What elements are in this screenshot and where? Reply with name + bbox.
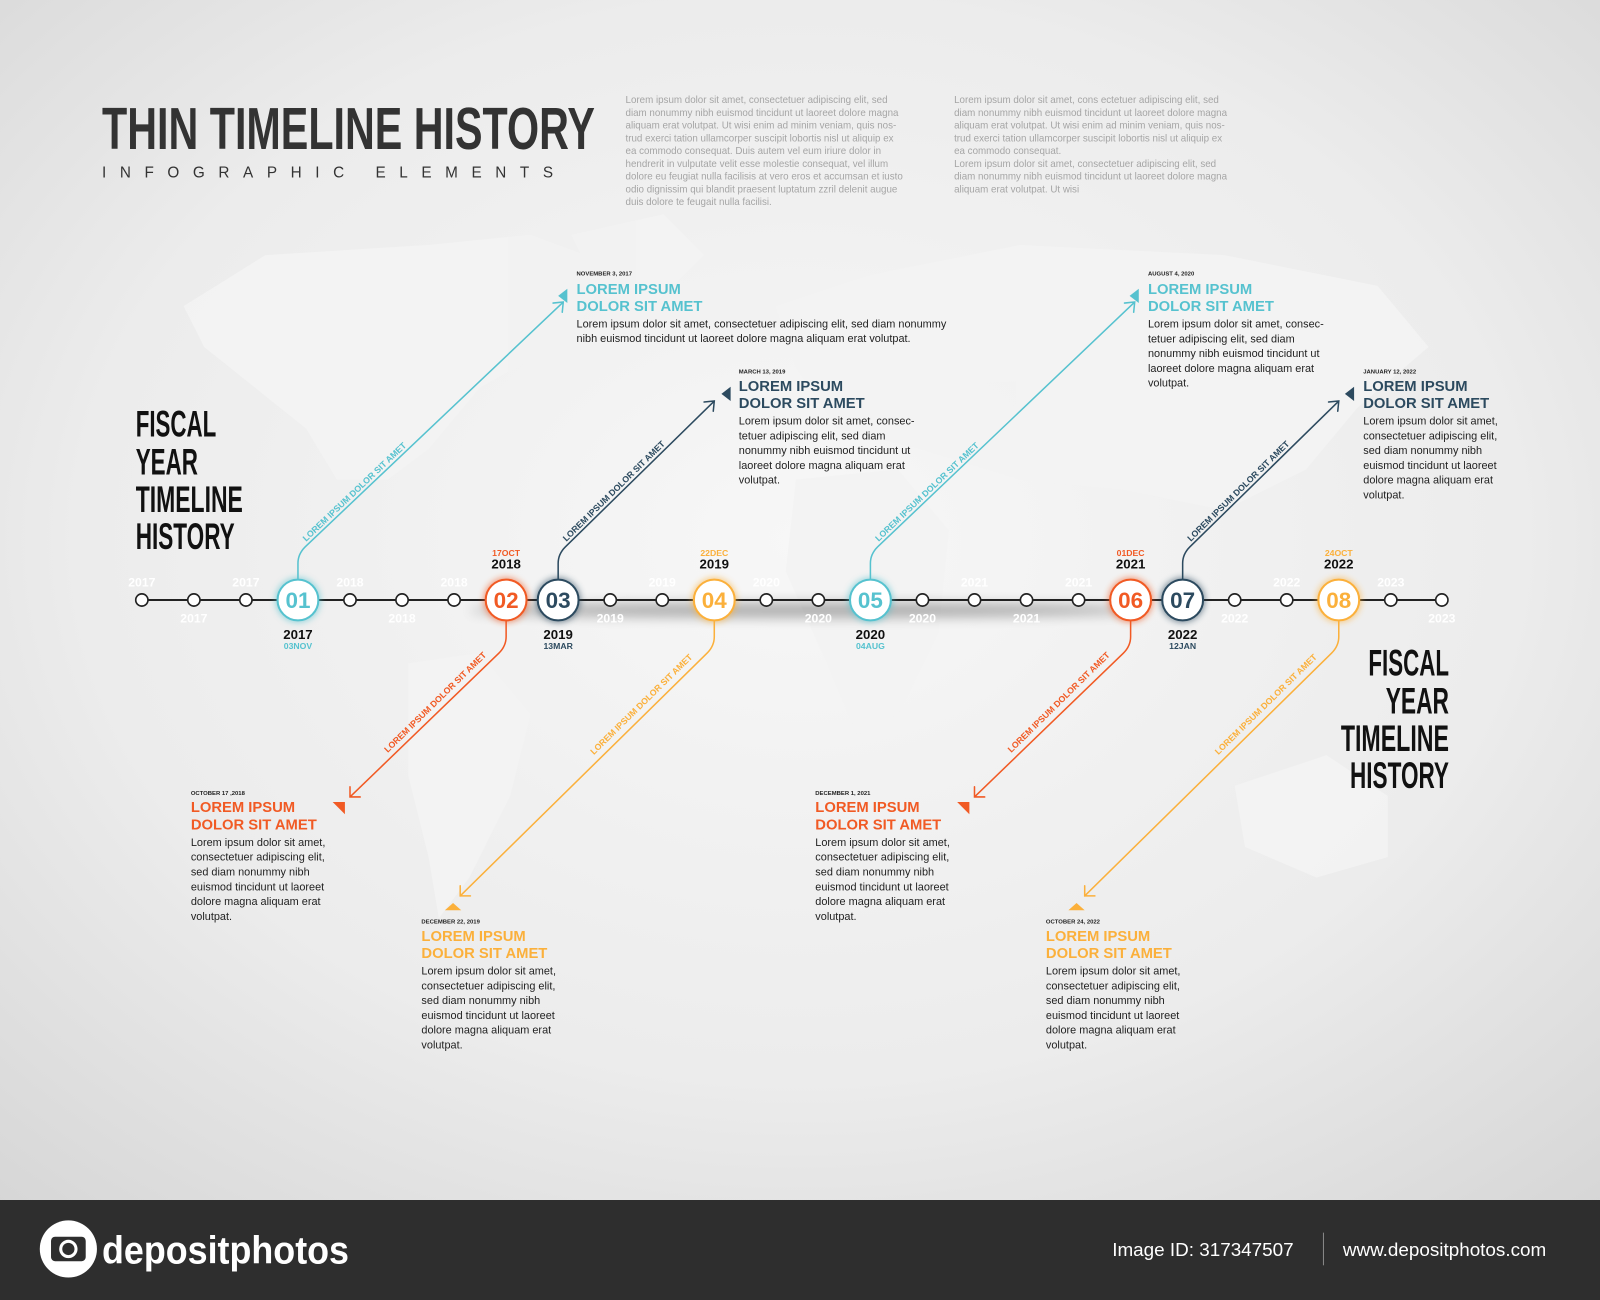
milestone 08: 08 — [1326, 588, 1351, 613]
milestone 02: 02 — [494, 588, 519, 613]
intro text column 1: dolore eu feugiat nulla facilisis at vero eros et accumsan et iusto — [626, 172, 903, 183]
event 04: volutpat. — [421, 1039, 463, 1051]
event 07: DOLOR SIT AMET — [1363, 396, 1489, 412]
timeline axis: 2017 — [180, 611, 208, 625]
event 07: volutpat. — [1363, 489, 1404, 501]
timeline axis — [128, 576, 1456, 625]
event 05 — [1130, 272, 1324, 390]
milestone date labels: 2020 — [856, 627, 885, 642]
intro text column 2: aliquam erat volutpat. Ut wisi enim ad minim veniam, quis nos- — [954, 121, 1225, 132]
timeline axis: 2021 — [1065, 576, 1092, 590]
footer bar: www.depositphotos.com — [1342, 1239, 1546, 1260]
event 04: consectetuer adipiscing elit, — [421, 980, 555, 992]
intro text column 1: Lorem ipsum dolor sit amet, consectetuer adipiscing elit, sed — [626, 95, 888, 106]
event 08 — [1046, 903, 1180, 1051]
intro text column 2 — [954, 95, 1228, 195]
event 07 — [1345, 369, 1498, 501]
event 07: LOREM IPSUM — [1363, 379, 1468, 395]
fiscal year heading left: TIMELINE — [136, 479, 243, 520]
event 06: consectetuer adipiscing elit, — [815, 852, 949, 864]
milestone date labels: 04AUG — [856, 641, 885, 651]
event 08: euismod tincidunt ut laoreet — [1046, 1010, 1179, 1022]
event 01: DOLOR SIT AMET — [577, 299, 702, 315]
intro text column 2: diam nonummy nibh euismod tincidunt ut laoreet dolore magna — [954, 172, 1228, 183]
intro text column 1: diam nonummy nibh euismod tincidunt ut laoreet dolore magna — [626, 108, 899, 119]
timeline axis: 2019 — [649, 576, 676, 590]
milestone circles — [276, 578, 1361, 622]
event 06: Lorem ipsum dolor sit amet, — [815, 837, 950, 849]
milestone 06 — [1108, 578, 1153, 622]
milestone date labels: 03NOV — [284, 641, 312, 651]
event 01: Lorem ipsum dolor sit amet, consectetuer adipiscing elit, sed diam nonummy — [577, 319, 947, 331]
diagonal labels: LOREM IPSUM DOLOR SIT AMET — [1213, 652, 1319, 757]
milestone date labels — [283, 548, 1354, 651]
fiscal year heading right: TIMELINE — [1341, 718, 1449, 759]
milestone 08 — [1316, 578, 1361, 622]
event 08: LOREM IPSUM — [1046, 929, 1150, 945]
milestone date labels: 2019 — [700, 556, 729, 571]
event 05: nonummy nibh euismod tincidunt ut — [1148, 348, 1320, 360]
event 07: dolore magna aliquam erat — [1363, 475, 1493, 487]
event 05: AUGUST 4, 2020 — [1148, 272, 1195, 278]
diagonal labels: LOREM IPSUM DOLOR SIT AMET — [301, 440, 409, 543]
milestone 03 — [536, 578, 581, 622]
title — [102, 95, 595, 182]
event 04: LOREM IPSUM — [421, 929, 526, 945]
event 03: Lorem ipsum dolor sit amet, consec- — [739, 415, 915, 427]
milestone date labels: 2022 — [1324, 556, 1354, 571]
event 05: laoreet dolore magna aliquam erat — [1148, 363, 1314, 375]
fiscal year heading right: FISCAL — [1368, 643, 1449, 684]
milestone 05 — [848, 578, 893, 622]
diagonal labels: LOREM IPSUM DOLOR SIT AMET — [561, 438, 667, 543]
event 08: sed diam nonummy nibh — [1046, 995, 1165, 1007]
timeline axis: 2023 — [1377, 576, 1405, 590]
timeline axis: 2021 — [961, 576, 988, 590]
timeline axis: 2017 — [128, 576, 156, 590]
fiscal year heading right — [1341, 643, 1449, 796]
intro text column 1: odio dignissim qui blandit praesent luptatum zzril delenit augue — [626, 184, 897, 195]
timeline shadow — [469, 603, 1143, 617]
connectors — [298, 302, 1339, 896]
timeline axis: 2020 — [909, 611, 936, 625]
event 08: consectetuer adipiscing elit, — [1046, 980, 1180, 992]
intro text column 2: Lorem ipsum dolor sit amet, cons ectetuer adipiscing elit, sed — [954, 95, 1219, 106]
icon: camera logo — [40, 1220, 97, 1278]
footer bar: Image ID: 317347507 — [1112, 1239, 1294, 1260]
event 02 — [191, 791, 345, 923]
timeline axis: 2023 — [1428, 611, 1456, 625]
event 05: LOREM IPSUM — [1148, 282, 1252, 298]
intro text column 1 — [626, 95, 903, 208]
timeline axis: 2020 — [753, 576, 780, 590]
intro text column 2: trud exerci tation ullamcorper suscipit lobortis nisl ut aliquip ex — [954, 133, 1222, 144]
event 05: tetuer adipiscing elit, sed diam — [1148, 333, 1295, 345]
fiscal year heading left: HISTORY — [136, 516, 235, 557]
milestone date labels: 2022 — [1168, 627, 1197, 642]
intro text column 1: trud exerci tation ullamcorper suscipit lobortis nisl ut aliquip ex — [626, 133, 894, 144]
milestone date labels: 2017 — [283, 627, 313, 642]
intro text column 1: aliquam erat volutpat. Ut wisi enim ad minim veniam, quis nos- — [626, 121, 896, 132]
event 06 — [815, 791, 969, 923]
event 02: volutpat. — [191, 911, 232, 923]
event 08: dolore magna aliquam erat — [1046, 1025, 1176, 1037]
event 07: Lorem ipsum dolor sit amet, — [1363, 415, 1498, 427]
event 02: euismod tincidunt ut laoreet — [191, 881, 324, 893]
event 07: consectetuer adipiscing elit, — [1363, 430, 1497, 442]
event 03: LOREM IPSUM — [739, 379, 843, 395]
event 03: MARCH 13, 2019 — [739, 369, 786, 375]
milestone 06: 06 — [1118, 588, 1143, 613]
event 06: LOREM IPSUM — [815, 800, 920, 816]
event 08: DOLOR SIT AMET — [1046, 946, 1172, 962]
milestone date labels: 24OCT — [1325, 548, 1353, 558]
event 05: DOLOR SIT AMET — [1148, 299, 1274, 315]
event 03: laoreet dolore magna aliquam erat — [739, 460, 905, 472]
footer bar — [0, 1200, 1600, 1300]
event 06: sed diam nonummy nibh — [815, 867, 934, 879]
milestone date labels: 13MAR — [543, 641, 574, 651]
timeline axis: 2022 — [1273, 576, 1301, 590]
title: THIN TIMELINE HISTORY — [102, 95, 595, 162]
timeline axis: 2020 — [805, 611, 832, 625]
milestone 07: 07 — [1170, 588, 1195, 613]
fiscal year heading left: FISCAL — [136, 404, 216, 445]
milestone 04: 04 — [702, 588, 727, 613]
event 02: sed diam nonummy nibh — [191, 867, 310, 879]
timeline axis: 2018 — [336, 576, 364, 590]
intro text column 2: ea commodo consequat. — [954, 146, 1061, 157]
diagonal labels: LOREM IPSUM DOLOR SIT AMET — [588, 652, 695, 757]
event 03: DOLOR SIT AMET — [739, 396, 865, 412]
milestone 04 — [692, 578, 737, 622]
world map silhouette — [184, 214, 1429, 918]
event 08: OCTOBER 24, 2022 — [1046, 919, 1101, 925]
event 03: tetuer adipiscing elit, sed diam — [739, 430, 885, 442]
event 04: euismod tincidunt ut laoreet — [421, 1010, 555, 1022]
milestone date labels: 2021 — [1116, 556, 1145, 571]
event 01 — [558, 272, 947, 345]
event 02: Lorem ipsum dolor sit amet, — [191, 837, 325, 849]
milestone date labels: 01DEC — [1117, 548, 1145, 558]
intro text column 2: aliquam erat volutpat. Ut wisi — [954, 184, 1079, 195]
event 04: DOLOR SIT AMET — [421, 946, 547, 962]
milestone 02 — [484, 578, 529, 622]
event 02: LOREM IPSUM — [191, 800, 295, 816]
event 03 — [721, 369, 915, 487]
event 05: volutpat. — [1148, 378, 1189, 390]
event 06: volutpat. — [815, 911, 857, 923]
intro text column 1: ea commodo consequat. Duis autem vel eum iriure dolor in — [626, 146, 881, 157]
event 01: nibh euismod tincidunt ut laoreet dolore magna aliquam erat volutpat. — [577, 333, 911, 345]
event 04: sed diam nonummy nibh — [421, 995, 540, 1007]
timeline axis: 2018 — [440, 576, 468, 590]
footer bar: depositphotos — [102, 1229, 349, 1272]
timeline axis: 2019 — [597, 611, 624, 625]
milestone date labels: 2018 — [491, 556, 521, 571]
event 07: euismod tincidunt ut laoreet — [1363, 460, 1497, 472]
event 02: DOLOR SIT AMET — [191, 818, 317, 834]
event 07: JANUARY 12, 2022 — [1363, 369, 1417, 375]
intro text column 1: hendrerit in vulputate velit esse molestie consequat, vel illum — [626, 159, 888, 170]
event 04 — [421, 903, 556, 1051]
event 03: nonummy nibh euismod tincidunt ut — [739, 445, 910, 457]
event 08: volutpat. — [1046, 1039, 1087, 1051]
diagonal labels — [301, 438, 1319, 757]
event 06: dolore magna aliquam erat — [815, 896, 945, 908]
intro text column 2: diam nonummy nibh euismod tincidunt ut laoreet dolore magna — [954, 108, 1228, 119]
milestone date labels: 12JAN — [1169, 641, 1196, 651]
event 04: dolore magna aliquam erat — [421, 1025, 551, 1037]
event 05: Lorem ipsum dolor sit amet, consec- — [1148, 319, 1324, 331]
timeline axis: 2022 — [1221, 611, 1248, 625]
milestone 07 — [1160, 578, 1205, 622]
event 03: volutpat. — [739, 475, 780, 487]
fiscal year heading left — [136, 404, 243, 557]
event 01: LOREM IPSUM — [577, 282, 681, 298]
event 04: Lorem ipsum dolor sit amet, — [421, 965, 556, 977]
event 02: consectetuer adipiscing elit, — [191, 852, 325, 864]
milestone date labels: 22DEC — [700, 548, 729, 558]
event 07: sed diam nonummy nibh — [1363, 445, 1482, 457]
timeline axis: 2018 — [388, 611, 416, 625]
milestone 05: 05 — [858, 588, 883, 613]
milestone date labels: 2019 — [543, 627, 573, 642]
event 08: Lorem ipsum dolor sit amet, — [1046, 965, 1180, 977]
diagonal labels: LOREM IPSUM DOLOR SIT AMET — [873, 440, 981, 543]
diagonal labels: LOREM IPSUM DOLOR SIT AMET — [1185, 438, 1292, 543]
milestone 01: 01 — [285, 588, 310, 613]
milestone 03: 03 — [546, 588, 571, 613]
milestone 01 — [276, 578, 320, 622]
fiscal year heading right: YEAR — [1386, 680, 1449, 721]
timeline axis: 2021 — [1013, 611, 1040, 625]
event 06: DECEMBER 1, 2021 — [815, 791, 871, 797]
event 02: dolore magna aliquam erat — [191, 896, 321, 908]
fiscal year heading right: HISTORY — [1350, 755, 1449, 796]
event 02: OCTOBER 17 ,2018 — [191, 791, 246, 797]
milestone date labels: 17OCT — [492, 548, 521, 558]
fiscal year heading left: YEAR — [136, 441, 198, 482]
event 06: DOLOR SIT AMET — [815, 818, 941, 834]
timeline axis: 2017 — [232, 576, 260, 590]
intro text column 1: duis dolore te feugait nulla facilisi. — [626, 197, 772, 208]
event 04: DECEMBER 22, 2019 — [421, 919, 481, 925]
subtitle: INFOGRAPHIC ELEMENTS — [102, 165, 571, 182]
event 01: NOVEMBER 3, 2017 — [577, 272, 633, 278]
intro text column 2: Lorem ipsum dolor sit amet, consectetuer adipiscing elit, sed — [954, 159, 1216, 170]
diagonal labels: LOREM IPSUM DOLOR SIT AMET — [382, 650, 489, 754]
diagonal labels: LOREM IPSUM DOLOR SIT AMET — [1006, 650, 1112, 754]
event 06: euismod tincidunt ut laoreet — [815, 881, 949, 893]
